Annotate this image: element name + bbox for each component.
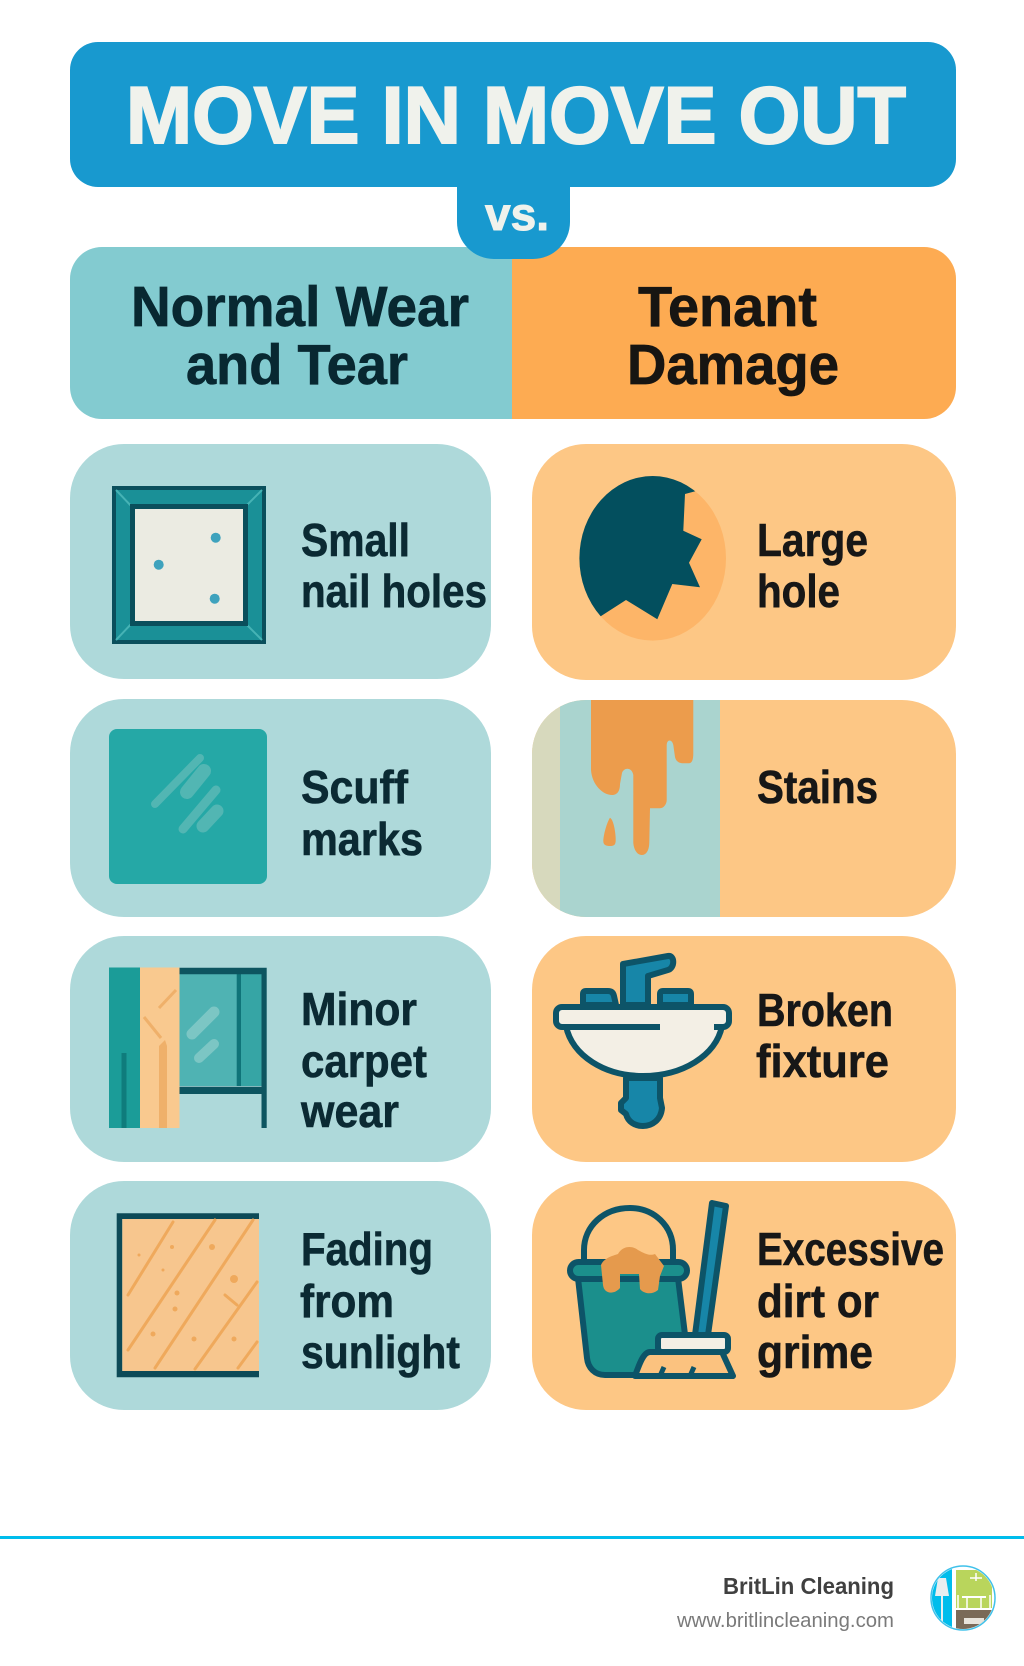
heading: tenant damage: Damage	[627, 333, 839, 397]
icon: large hole in wall	[579, 476, 726, 640]
label: Broken	[757, 984, 893, 1036]
label: dirt or	[757, 1275, 879, 1327]
label: marks	[301, 813, 423, 865]
icon: company logo	[931, 1566, 995, 1630]
label: Excessive	[757, 1223, 944, 1275]
heading: normal wear and tear: Normal Wear	[131, 275, 469, 339]
label: Scuff	[301, 761, 409, 813]
label	[757, 514, 868, 617]
label: nail holes	[301, 565, 487, 617]
icon: stain on wall	[532, 700, 720, 917]
label: Small	[301, 514, 410, 566]
label: hole	[757, 565, 840, 617]
panel: fading from sunlight	[70, 1181, 491, 1410]
icon: sink	[556, 956, 729, 1126]
heading: tenant damage: Tenant	[638, 275, 817, 339]
icon: worn carpet	[109, 968, 267, 1128]
panel: excessive dirt or grime	[532, 1181, 956, 1410]
label: Fading	[301, 1223, 433, 1275]
panel: stains	[532, 700, 956, 917]
heading: normal wear and tear	[70, 247, 512, 419]
label	[301, 514, 487, 617]
footer brand	[676, 1573, 894, 1632]
icon: scuffed wall	[109, 729, 267, 884]
label: carpet	[301, 1035, 427, 1087]
label	[757, 1223, 944, 1378]
label: Stains	[757, 761, 878, 813]
label: grime	[757, 1326, 873, 1378]
title: MOVE IN MOVE OUT	[126, 71, 906, 161]
label	[756, 984, 893, 1087]
label: Minor	[301, 983, 417, 1035]
panel: large hole	[532, 444, 956, 680]
header banner	[70, 42, 956, 187]
panel: broken fixture	[532, 936, 956, 1162]
heading: tenant damage	[512, 247, 956, 419]
panel: small nail holes	[70, 444, 491, 679]
column headings	[70, 247, 956, 419]
footer brand: www.britlincleaning.com	[676, 1609, 894, 1632]
icon: faded floor	[117, 1213, 259, 1377]
label: sunlight	[301, 1326, 460, 1378]
vs. tab: vs.	[485, 188, 549, 240]
heading: normal wear and tear: and Tear	[186, 333, 408, 397]
panel: scuff marks	[70, 699, 491, 917]
vs. tab	[457, 186, 570, 259]
icon: bucket and broom	[570, 1203, 733, 1376]
label	[300, 983, 427, 1137]
label: Large	[757, 514, 868, 566]
label: wear	[300, 1085, 399, 1137]
label: fixture	[756, 1035, 889, 1087]
label	[300, 1223, 460, 1378]
panel: minor carpet wear	[70, 936, 491, 1162]
label	[301, 761, 423, 865]
label: from	[300, 1275, 394, 1327]
footer brand: BritLin Cleaning	[723, 1573, 894, 1599]
icon: wall frame with nail holes	[112, 486, 266, 644]
